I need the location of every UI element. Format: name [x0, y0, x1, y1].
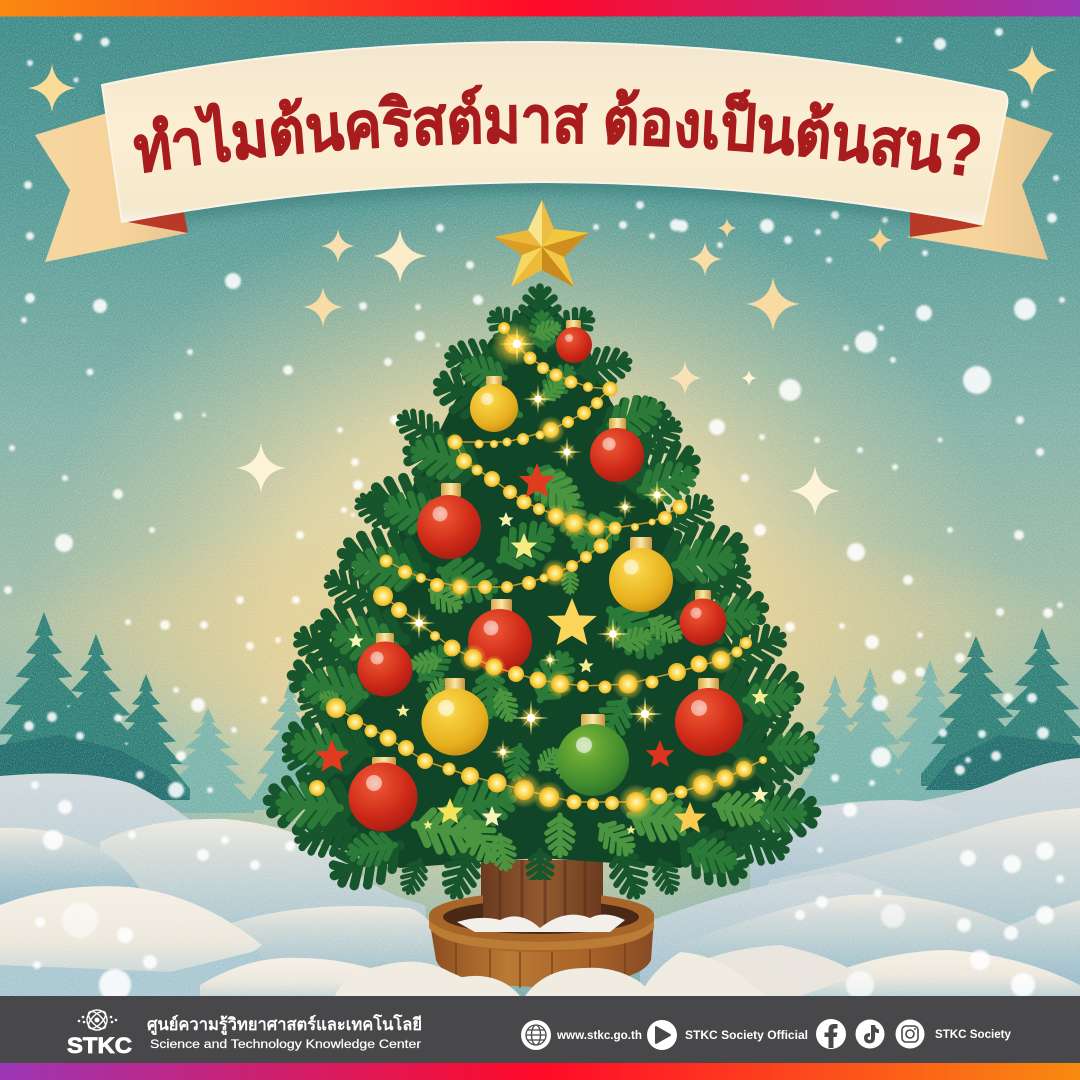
- red bauble 1: [556, 320, 592, 363]
- gold bauble 1: [470, 376, 518, 432]
- gold bauble 3: [422, 678, 488, 756]
- ornaments: bauble caps and balls: [348, 320, 743, 832]
- website label: www.stkc.go.th: [556, 1030, 642, 1042]
- garlands of lights: [380, 322, 688, 599]
- top gradient bar: [0, 0, 1080, 16]
- footer bar: [0, 996, 1080, 1063]
- instagram label: STKC Society: [935, 1029, 1012, 1041]
- STKC logo: [67, 1009, 132, 1058]
- gold tree-top star: [494, 200, 589, 287]
- icon: instagram: [896, 1020, 924, 1048]
- trunk: [481, 860, 603, 928]
- icon: website globe: [521, 1020, 551, 1050]
- icon: youtube play: [647, 1020, 677, 1050]
- red bauble 8: [348, 757, 418, 832]
- trunk in pot: [483, 880, 601, 930]
- left pine trees: [0, 612, 190, 800]
- organisation name: ศูนย์ความรู้วิทยาศาสตร์และเทคโนโลยี: [147, 1014, 422, 1036]
- lower garlands over baubles: [309, 586, 767, 820]
- snow mounds around pot: [335, 952, 765, 996]
- STKC logo: STKC: [67, 1033, 132, 1058]
- snow in pot: [457, 914, 625, 932]
- red bauble 2: [590, 418, 644, 482]
- christmas tree foliage: [266, 287, 817, 902]
- distant pale pine trees: [162, 660, 978, 813]
- snow hills: [0, 758, 1080, 1000]
- title: ทำไมต้นคริสต์มาส ต้องเป็นต้นสน?: [134, 84, 980, 176]
- red bauble 6: [358, 633, 412, 696]
- organisation name: [147, 1014, 422, 1051]
- red bauble 5: [468, 599, 532, 673]
- red bauble 7: [675, 678, 743, 756]
- small stars on tree: [315, 463, 769, 834]
- icon: facebook: [816, 1019, 846, 1049]
- green bauble: [557, 714, 629, 796]
- wooden pot: [429, 880, 654, 988]
- banner: right ribbon tail: [907, 115, 1053, 260]
- youtube label: STKC Society Official: [685, 1030, 808, 1042]
- right pine trees: [921, 628, 1080, 790]
- red bauble 4: [680, 590, 726, 646]
- icon: tiktok: [856, 1020, 884, 1048]
- banner: left ribbon tail: [35, 112, 188, 262]
- banner drop shadow: [102, 50, 1003, 234]
- background sparkle stars: [28, 45, 1057, 516]
- bottom gradient bar: [0, 1063, 1080, 1080]
- gold bauble 2: [609, 537, 673, 612]
- organisation name: Science and Technology Knowledge Center: [150, 1039, 421, 1051]
- twinkling light sparkles: [402, 326, 672, 765]
- light green fronds: [319, 318, 763, 871]
- banner: main scroll: [102, 42, 1007, 224]
- outer dark fronds: [266, 287, 817, 902]
- mid green fronds: [278, 311, 813, 877]
- red bauble 3: [417, 483, 481, 559]
